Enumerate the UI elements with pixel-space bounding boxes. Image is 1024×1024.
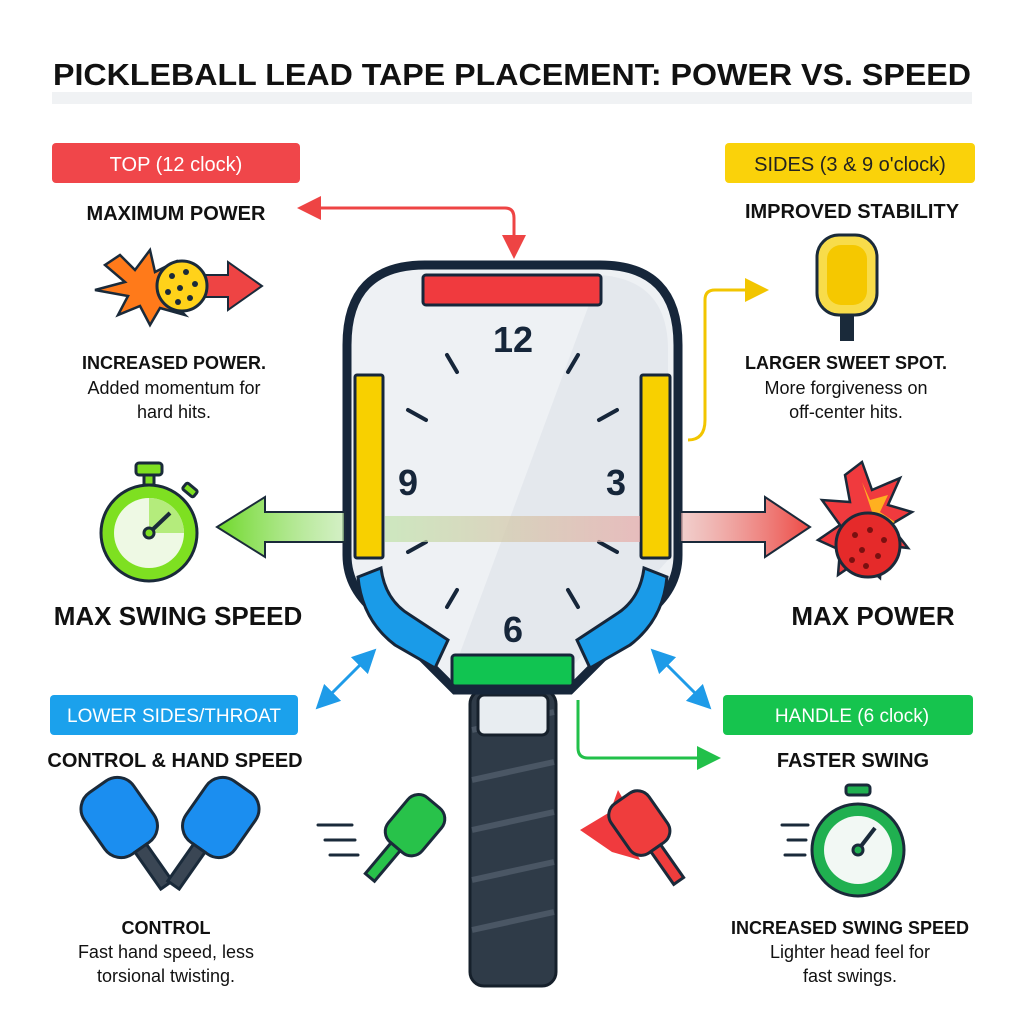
heading: control & hand speed: CONTROL & HAND SPEED [47, 750, 303, 772]
text: control: torsional twisting. [97, 966, 235, 986]
arrow: yellow [688, 290, 760, 440]
text: increased power: INCREASED POWER. [82, 353, 266, 373]
text: increased power: hard hits. [137, 402, 211, 422]
label: handle [723, 695, 973, 735]
icon: dark green stopwatch [782, 785, 904, 896]
tape: left yellow [355, 375, 383, 558]
text: control: Fast hand speed, less [78, 942, 254, 962]
icon: green stopwatch [101, 463, 198, 581]
arrow: red right [680, 497, 810, 557]
heading: max swing speed: MAX SWING SPEED [54, 601, 302, 631]
arrow: green left [217, 497, 345, 557]
clock face: 12 [493, 319, 533, 360]
text: increased power [82, 353, 266, 422]
title: PICKLEBALL LEAD TAPE PLACEMENT: POWER VS. SPEED [53, 57, 971, 92]
arrow: green handle [578, 700, 712, 758]
arrow: blue left [322, 655, 370, 703]
icon: crossed paddles [73, 770, 267, 902]
icon: yellow paddle [817, 235, 877, 341]
text: control [78, 918, 254, 986]
arrow band across paddle [385, 516, 640, 542]
text: control: CONTROL [122, 918, 210, 938]
text: larger sweet spot [745, 353, 947, 422]
clock face: 3 [606, 462, 626, 503]
text: increased swing speed: fast swings. [803, 966, 897, 986]
heading: faster swing: FASTER SWING [777, 750, 929, 772]
arrow: blue right [657, 655, 705, 703]
text: increased swing speed [731, 918, 969, 986]
label: lower sides: LOWER SIDES/THROAT [67, 706, 281, 727]
clock face [398, 319, 626, 650]
arrow: top [312, 208, 514, 250]
icon: ball with burst [95, 250, 262, 325]
clock face: 9 [398, 462, 418, 503]
label: lower sides [50, 695, 298, 735]
heading: maximum power: MAXIMUM POWER [87, 203, 266, 225]
text: larger sweet spot: off-center hits. [789, 402, 903, 422]
label: sides: SIDES (3 & 9 o'clock) [754, 154, 946, 176]
text: increased swing speed: Lighter head feel for [770, 942, 930, 962]
handle [470, 690, 556, 986]
text: larger sweet spot: LARGER SWEET SPOT. [745, 353, 947, 373]
icon: red paddle with burst [580, 785, 698, 894]
text: increased swing speed: INCREASED SWING SPEED [731, 918, 969, 938]
heading: max power: MAX POWER [791, 601, 955, 631]
text: increased power: Added momentum for [87, 378, 261, 398]
tape: right yellow [641, 375, 670, 558]
label: top [52, 143, 300, 183]
heading: improved stability: IMPROVED STABILITY [745, 201, 960, 223]
tape: left blue [358, 568, 448, 668]
label: handle: HANDLE (6 clock) [775, 706, 929, 727]
paddle [347, 265, 678, 986]
label: top: TOP (12 clock) [110, 154, 242, 176]
text: larger sweet spot: More forgiveness on [764, 378, 928, 398]
tape: top red [423, 275, 601, 305]
icon: red ball burst [818, 462, 912, 578]
icon: small green paddle [318, 789, 451, 892]
tape: handle green [452, 655, 573, 686]
label: sides [725, 143, 975, 183]
tape: right blue [577, 568, 667, 668]
clock face: 6 [503, 609, 523, 650]
